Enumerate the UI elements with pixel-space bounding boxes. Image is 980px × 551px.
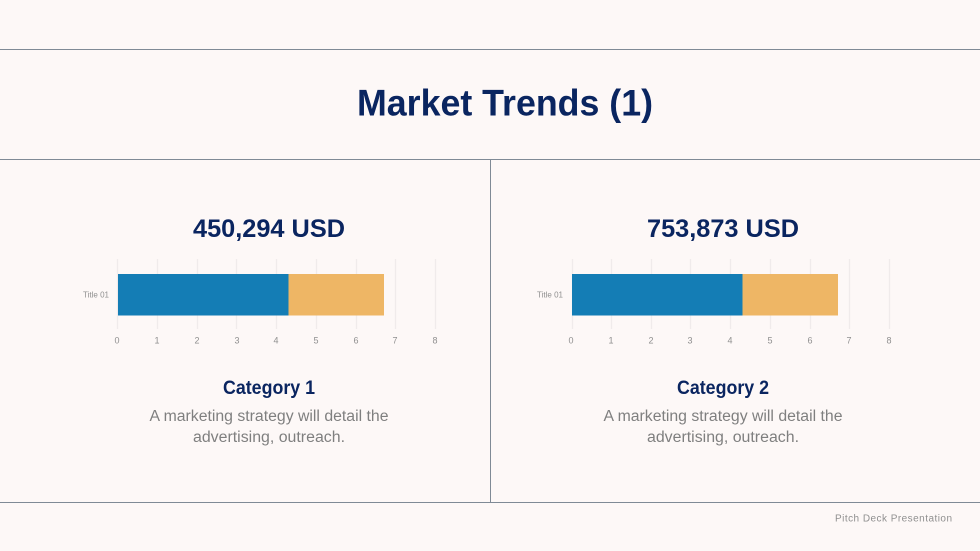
bar chart: category 2: 7 [846,336,852,346]
bar chart: category 2: 8 [886,336,892,346]
bar chart: category 2: 6 [807,336,813,346]
bar chart: category 2: 5 [767,336,773,346]
bar chart: category 1: 0 [114,336,120,346]
description: category 1: advertising, outreach. [193,429,345,446]
footer label: Pitch Deck Presentation [835,514,952,524]
bar chart: category 1: 4 [273,336,279,346]
description: category 1: A marketing strategy will detail the [150,408,388,425]
bar chart: category 1: 5 [313,336,319,346]
description: category 2: advertising, outreach. [647,429,799,446]
description: category 2: A marketing strategy will detail the [604,408,842,425]
bar chart: category 1: 8 [432,336,438,346]
panel: category 1 [83,215,438,446]
bar chart: category 2: 4 [727,336,733,346]
description: category 2 [604,408,842,446]
bar chart: category 1: Title 01 [83,290,109,300]
bar chart: category 2: 3 [687,336,693,346]
bar chart: category 1: 3 [234,336,240,346]
heading: Category 1: Category 1 [223,378,315,399]
bar chart: category 1: 1 [154,336,160,346]
bar chart: category 1: 2 [194,336,200,346]
bar chart: category 1: 6 [353,336,359,346]
value: 753,873 USD: 753,873 USD [647,215,799,243]
bar chart: category 1: 7 [392,336,398,346]
bar chart: category 2: 1 [608,336,614,346]
panel: category 2 [537,215,892,446]
title: Market Trends (1) [357,82,653,124]
bar chart: category 2 [537,259,892,346]
bar chart: category 1 [83,259,438,346]
bar chart: category 2: 0 [568,336,574,346]
description: category 1 [150,408,388,446]
value: 450,294 USD: 450,294 USD [193,215,345,243]
heading: Category 2: Category 2 [677,378,769,399]
bar chart: category 2: 2 [648,336,654,346]
bar chart: category 2: Title 01 [537,290,563,300]
